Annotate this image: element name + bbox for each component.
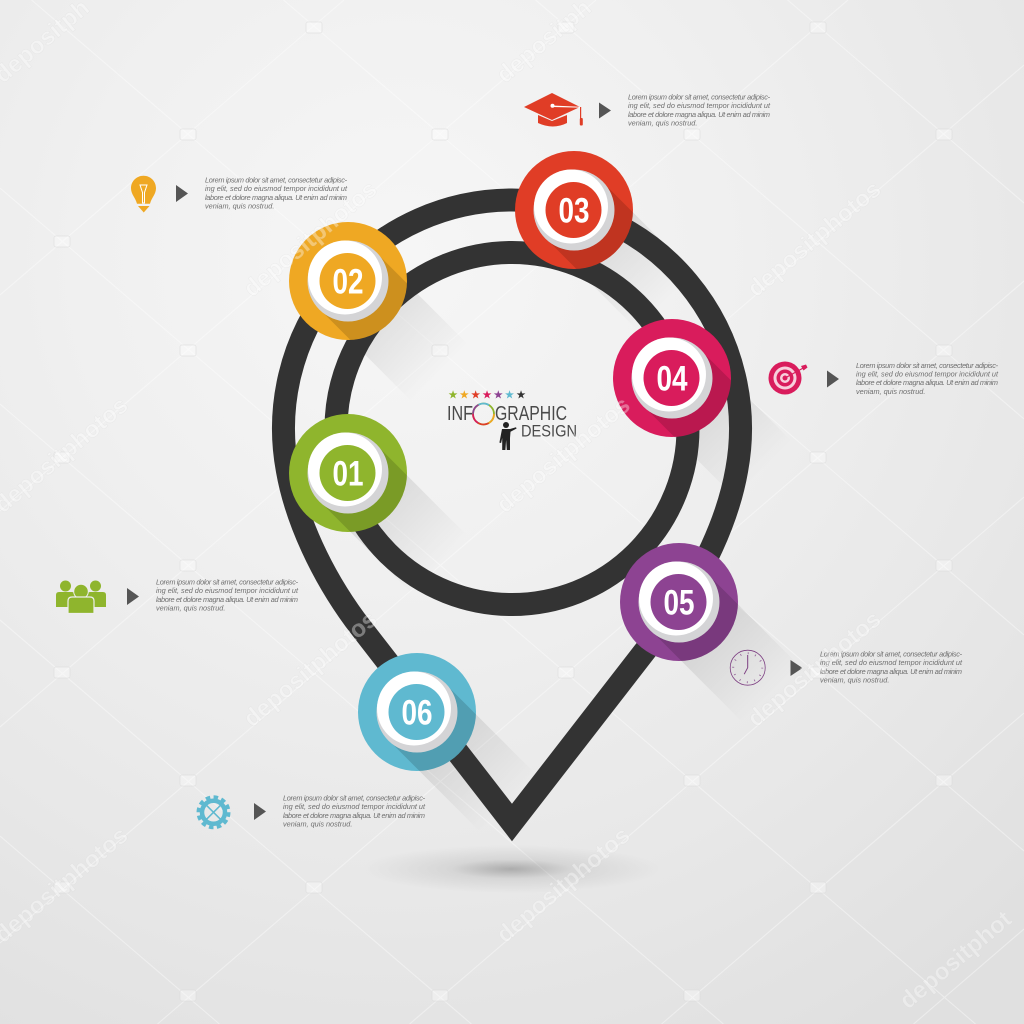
text block: veniam, quis nostrud.: [628, 119, 697, 128]
text block: Lorem ipsum dolor sit amet, consectetur adipisc-: [628, 92, 771, 102]
text block: [205, 176, 348, 211]
info item 01: team: [56, 578, 299, 614]
text block: labore et dolore magna aliqua. Ut enim ad minim: [820, 667, 962, 676]
text block: Lorem ipsum dolor sit amet, consectetur adipisc-: [156, 578, 299, 586]
icon: gear: [198, 797, 228, 827]
info item 06: settings: [198, 794, 426, 829]
watermark: depositphotos: [743, 176, 887, 303]
rating stars: ★: [471, 388, 481, 402]
info item 02: idea: [131, 176, 348, 212]
text block: labore et dolore magna aliqua. Ut enim ad minim: [628, 110, 770, 119]
icon: light bulb: [131, 176, 156, 212]
step 05 badge: 05: [664, 584, 694, 622]
text block: ing elit, sed do eiusmod tempor incididunt ut: [283, 802, 426, 811]
text block: ing elit, sed do eiusmod tempor incididunt ut: [820, 658, 963, 667]
text block: Lorem ipsum dolor sit amet, consectetur adipisc-: [205, 176, 348, 184]
text block: Lorem ipsum dolor sit amet, consectetur adipisc-: [283, 794, 426, 802]
word: DESIGN: DESIGN: [521, 422, 577, 440]
watermark: depositphotos: [492, 822, 636, 949]
watermark: depositphot: [895, 906, 1017, 1015]
text block: [156, 578, 299, 613]
rating stars: [448, 388, 526, 402]
info item 05: time: [730, 650, 963, 685]
info item 04: target: [768, 361, 999, 396]
step 01 badge: [289, 414, 407, 532]
step 03 badge: [515, 151, 633, 269]
text block: ing elit, sed do eiusmod tempor incididunt ut: [628, 101, 771, 110]
watermark: depositphotos: [239, 606, 383, 733]
rating stars: ★: [482, 388, 492, 402]
text block: [856, 361, 999, 396]
long shadows on background: [320, 182, 799, 832]
watermark: depositphotos: [743, 606, 887, 733]
arrow: [790, 660, 802, 676]
text block: veniam, quis nostrud.: [820, 676, 889, 685]
text block: labore et dolore magna aliqua. Ut enim ad minim: [856, 378, 998, 387]
step 04 badge: 04: [657, 360, 688, 398]
rating stars: ★: [516, 388, 526, 402]
info item 03: education: [524, 92, 771, 128]
step 05 badge: [620, 543, 738, 661]
rating stars: ★: [459, 388, 469, 402]
watermark: depositphotos: [492, 392, 636, 519]
text block: [283, 794, 426, 829]
icon: group of people: [56, 580, 106, 614]
rating stars: ★: [448, 388, 458, 402]
pin inner ring: [336, 252, 688, 604]
text block: Lorem ipsum dolor sit amet, consectetur adipisc-: [820, 650, 963, 658]
icon: target with arrow: [768, 362, 808, 394]
word: GRAPHIC: GRAPHIC: [495, 403, 567, 425]
text block: [820, 650, 963, 685]
rating stars: ★: [504, 388, 515, 402]
text block: labore et dolore magna aliqua. Ut enim ad minim: [156, 595, 298, 604]
step 02 badge: 02: [333, 262, 363, 302]
rating stars: ★: [493, 388, 503, 402]
step 04 badge: [613, 319, 731, 437]
text block: veniam, quis nostrud.: [205, 202, 274, 211]
icon: clock: [730, 650, 765, 685]
step 01 badge: 01: [333, 454, 363, 494]
text block: labore et dolore magna aliqua. Ut enim ad minim: [283, 811, 425, 820]
text block: [628, 92, 771, 128]
watermark: depositphotos: [239, 176, 383, 303]
arrow: [827, 370, 839, 388]
pin outer contour: [284, 200, 740, 822]
text block: ing elit, sed do eiusmod tempor incididunt ut: [856, 370, 999, 378]
step 06 badge: 06: [402, 694, 432, 732]
presenter figure: [499, 422, 517, 450]
arrow: [127, 588, 139, 605]
text block: veniam, quis nostrud.: [856, 387, 925, 396]
icon: graduation cap: [524, 93, 583, 126]
text block: ing elit, sed do eiusmod tempor incididunt ut: [156, 586, 299, 595]
text block: veniam, quis nostrud.: [156, 604, 225, 613]
multicolor O ring: [473, 404, 494, 424]
arrow: [599, 102, 611, 118]
text block: labore et dolore magna aliqua. Ut enim ad minim: [205, 193, 347, 202]
ground shadow: [361, 845, 661, 893]
location pin outline: [284, 200, 740, 822]
step 06 badge: [358, 653, 476, 771]
arrow: [254, 803, 266, 820]
arrow: [176, 185, 188, 202]
center logo: infographic design: [447, 388, 577, 450]
word: INF: INF: [447, 403, 473, 425]
text block: Lorem ipsum dolor sit amet, consectetur adipisc-: [856, 361, 999, 370]
text block: ing elit, sed do eiusmod tempor incididunt ut: [205, 184, 348, 193]
step 03 badge: 03: [559, 192, 589, 230]
text block: veniam, quis nostrud.: [283, 820, 352, 829]
step 02 badge: [289, 222, 407, 340]
